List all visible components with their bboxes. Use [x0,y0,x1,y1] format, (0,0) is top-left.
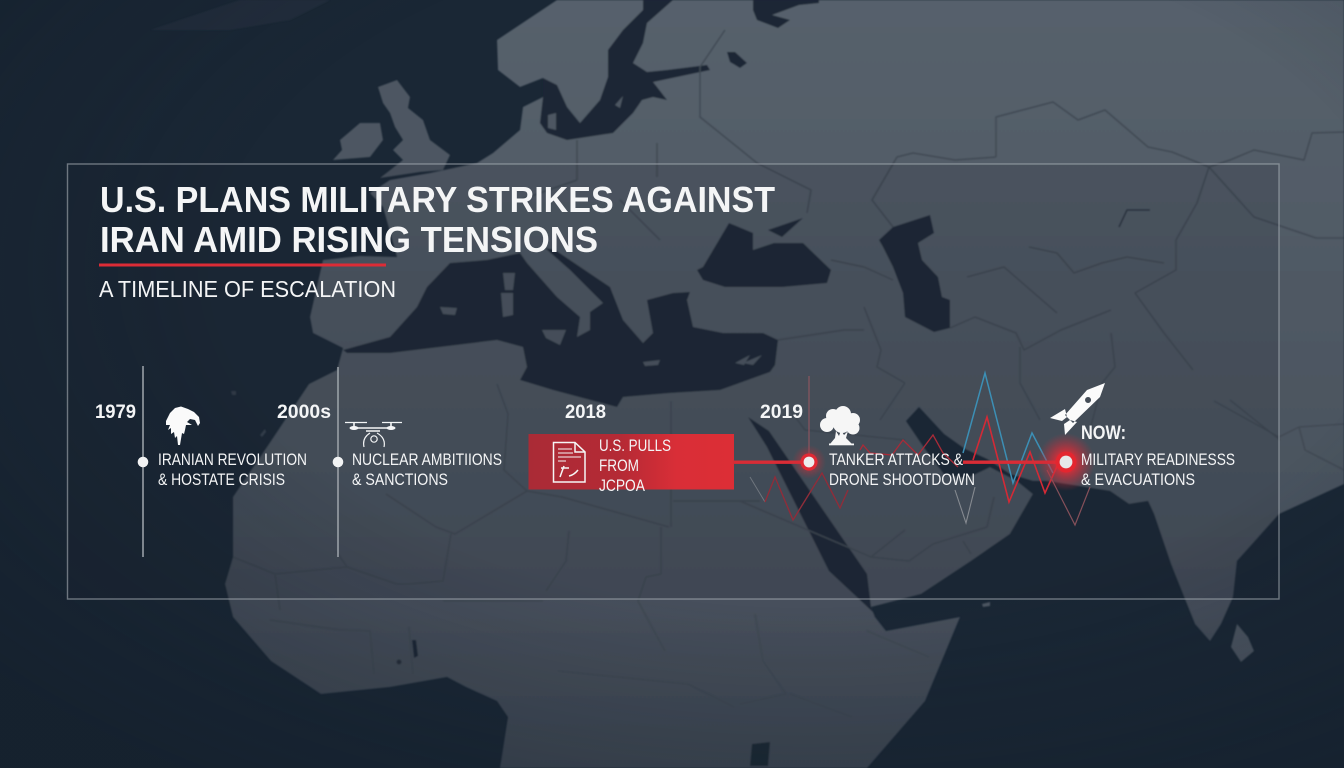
icon: explosion cloud [820,406,860,445]
event: 2019: DRONE SHOOTDOWN [829,470,975,489]
red callout box [528,434,734,490]
event: 2018: U.S. PULLS [599,436,671,455]
event: now [1037,383,1235,491]
event: 1979: IRANIAN REVOLUTION [158,450,307,469]
icon: document [554,442,585,482]
event: now: NOW: [1081,423,1126,444]
event: 2018: JCPOA [599,476,646,495]
event: 2018: 2018 [565,402,606,423]
icon: eagle [166,406,200,445]
title underline [99,264,386,266]
event: 2018: FROM [599,456,639,475]
title: U.S. PLANS MILITARY STRIKES AGAINST [100,179,775,220]
event: 1979 [95,366,307,557]
event: 1979: 1979 [95,402,136,423]
event: 2019 [760,376,975,489]
connector line 2018 to 2019 [733,460,809,464]
subtitle: A TIMELINE OF ESCALATION [99,276,396,302]
title [100,179,775,260]
event: 2019: TANKER ATTACKS & [829,450,964,469]
event: now: MILITARY READINESSS [1081,450,1235,469]
event: now: & EVACUATIONS [1081,470,1195,489]
event: 2000s [277,367,502,557]
borders [233,30,1344,717]
chart: zigzag tension lines [750,373,1090,525]
title: IRAN AMID RISING TENSIONS [100,219,598,260]
event: 2000s: NUCLEAR AMBITIIONS [352,450,502,469]
panel: timeline frame [68,164,1279,599]
event: 2000s: 2000s [277,402,331,423]
event: 2019: 2019 [760,402,803,423]
event: 2018 [528,402,734,495]
icon: drone [345,422,402,447]
event: 2000s: & SANCTIONS [352,470,448,489]
event: 1979: & HOSTATE CRISIS [158,470,285,489]
icon: rocket [1050,383,1105,435]
UK / Ireland / islands [231,80,1254,662]
connector line 2019 to now [963,460,1063,464]
